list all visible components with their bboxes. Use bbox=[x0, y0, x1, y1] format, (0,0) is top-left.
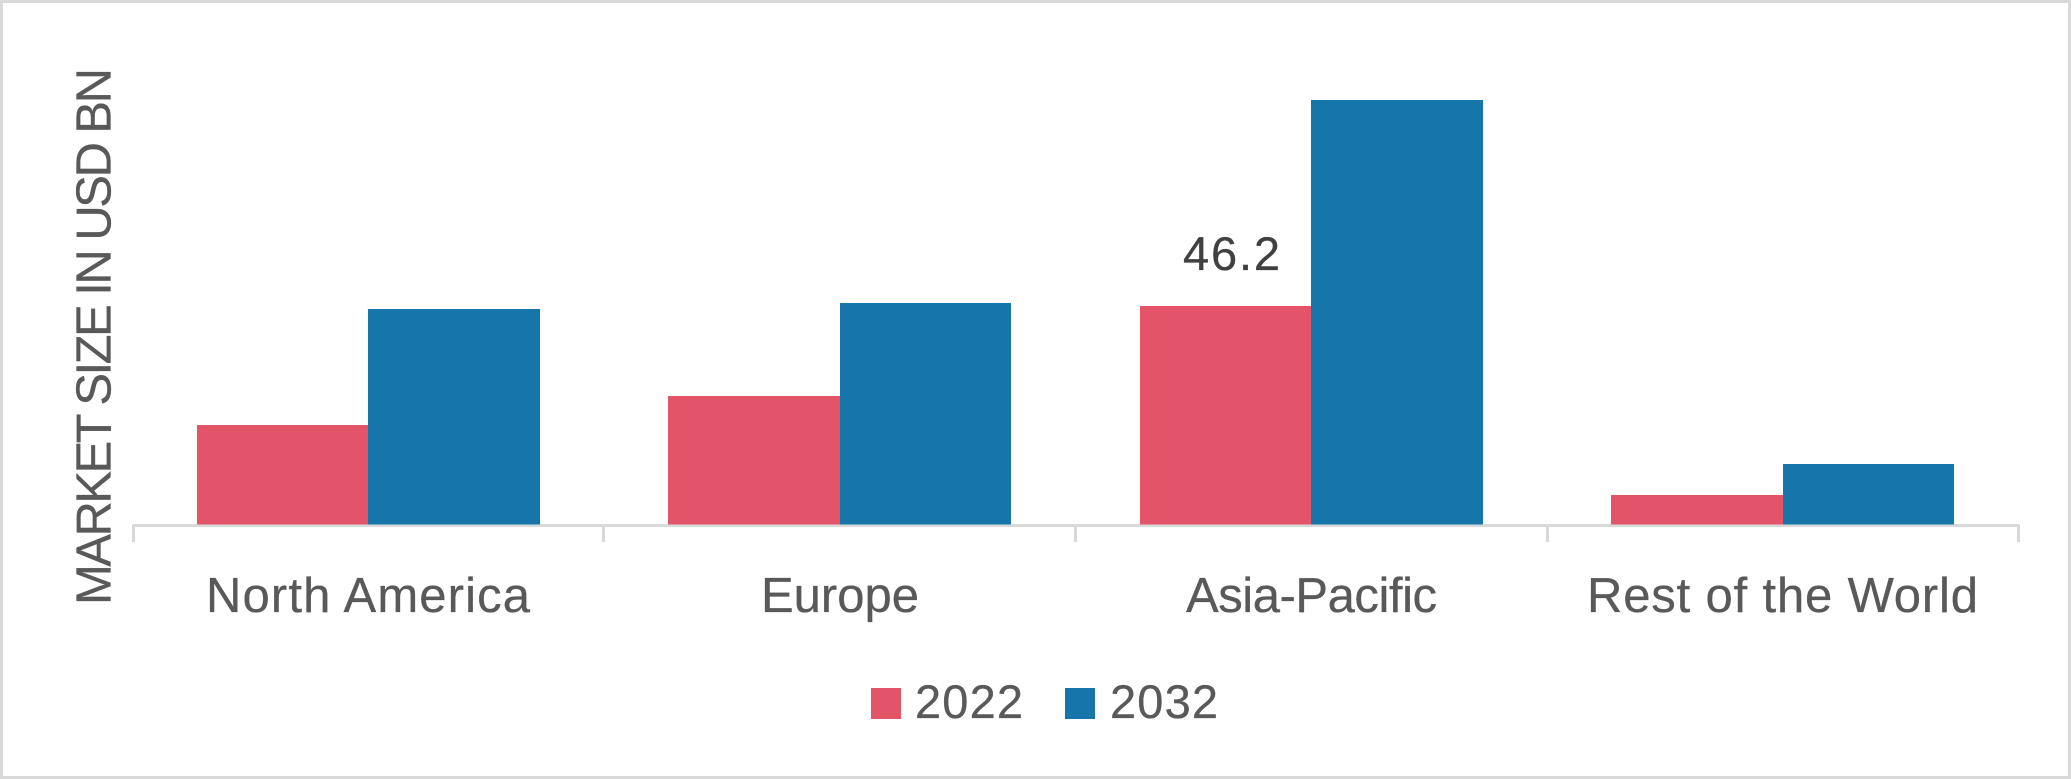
legend swatch: 2032 bbox=[1065, 688, 1095, 719]
bars: Asia-Pacific bbox=[1140, 100, 1483, 524]
category label: North America: North America bbox=[206, 569, 531, 623]
legend label: 2032: 2032 bbox=[1110, 675, 1218, 728]
category label: Rest of the World: Rest of the World bbox=[1587, 569, 1978, 623]
legend bbox=[871, 675, 1218, 728]
y-axis title: MARKET SIZE IN USD BN bbox=[68, 68, 122, 605]
bars: Rest of the World bbox=[1611, 464, 1954, 524]
bars: North America bbox=[197, 309, 540, 524]
data label: Asia-Pacific 2022 value: 46.2 bbox=[1183, 227, 1280, 280]
x axis with tick marks bbox=[132, 524, 2020, 542]
legend label: 2022: 2022 bbox=[915, 675, 1023, 728]
category label: Europe: Europe bbox=[761, 569, 919, 623]
legend swatch: 2022 bbox=[871, 688, 901, 719]
category label: Asia-Pacific: Asia-Pacific bbox=[1186, 569, 1437, 623]
bars: Europe bbox=[668, 303, 1011, 524]
